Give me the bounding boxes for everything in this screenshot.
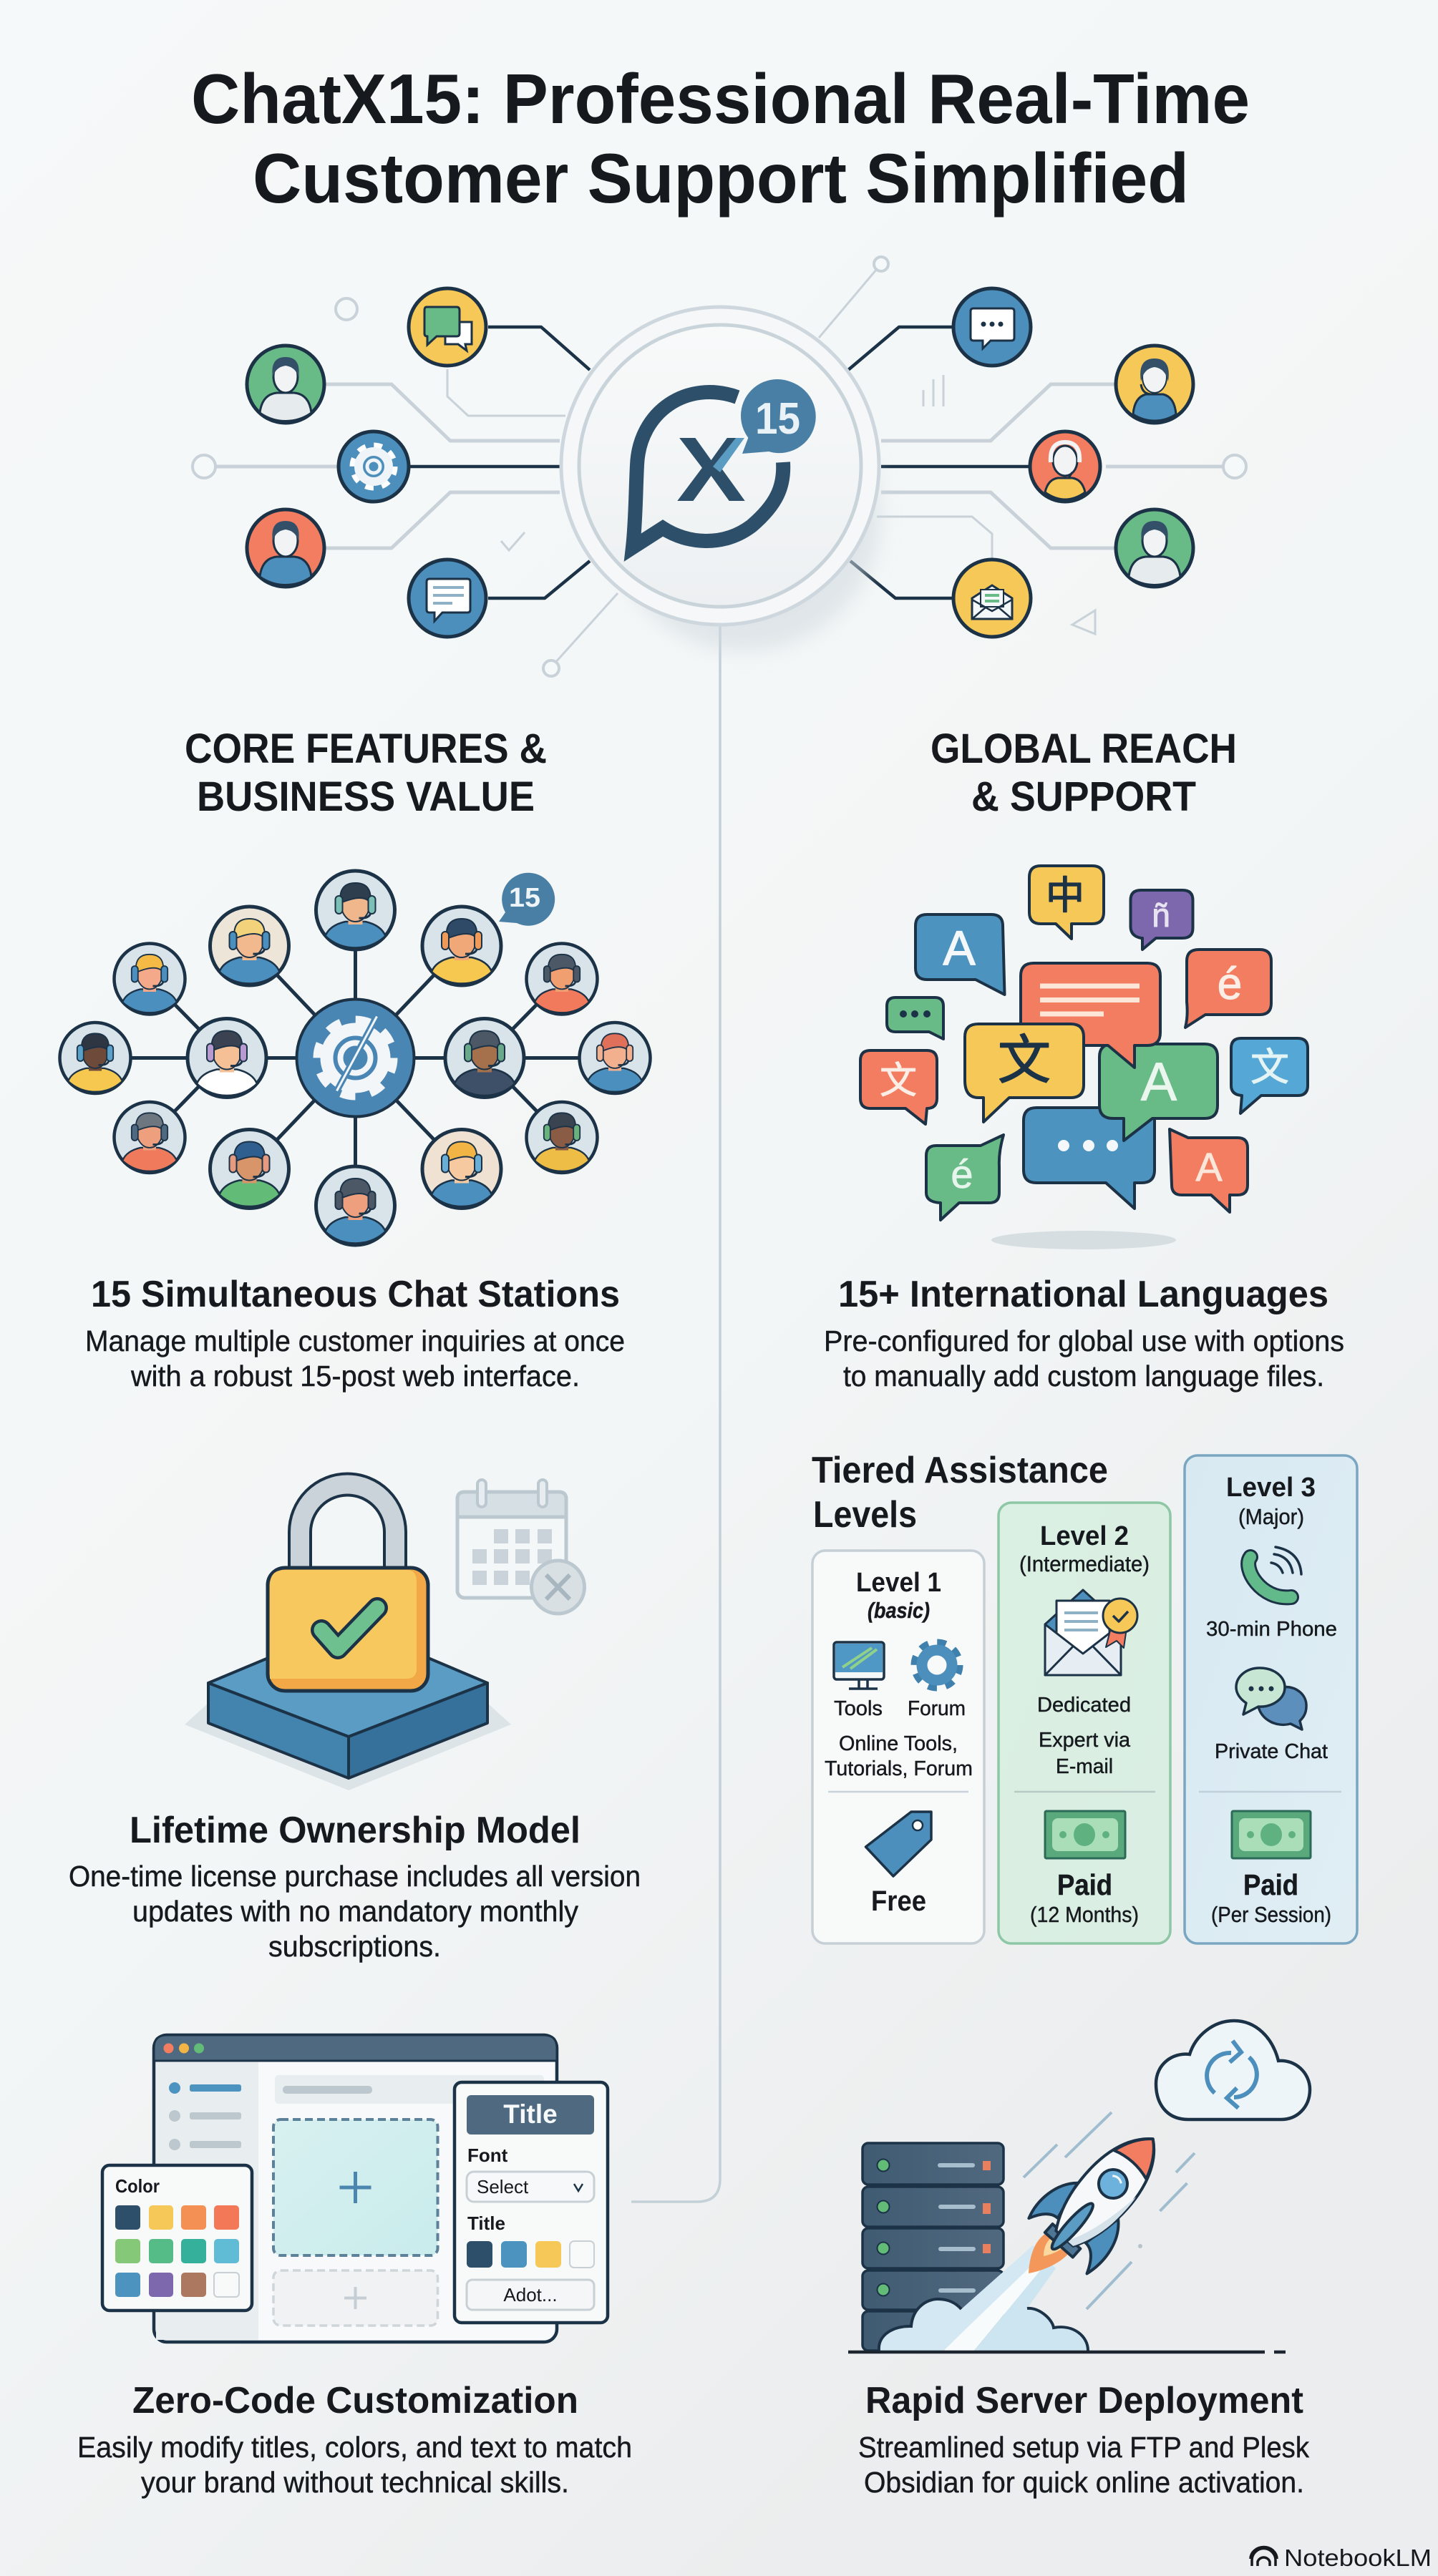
bubble: green dots small <box>887 997 943 1039</box>
calendar with x <box>457 1480 584 1614</box>
panel: level 3: Level 3 <box>1226 1473 1316 1503</box>
text: rapid server deployment <box>858 2380 1309 2499</box>
icon: monitor <box>834 1642 884 1689</box>
decorative nodes and marks <box>193 257 1246 676</box>
icon: certified email <box>1045 1590 1137 1675</box>
bubble: red A <box>1170 1129 1248 1212</box>
bubble: blue wen <box>1231 1038 1308 1113</box>
settings panel: Select <box>477 2176 529 2197</box>
spokes <box>95 910 615 1206</box>
lock body <box>268 1568 428 1691</box>
bubble: red wen <box>860 1050 937 1124</box>
watermark: NotebookLM: NotebookLM <box>1284 2545 1432 2571</box>
logo: chat bubble X15 <box>633 379 816 547</box>
node: yellow chat <box>409 288 486 366</box>
heading: tiered assistance levels: Tiered Assistance <box>812 1450 1108 1491</box>
central logo disc <box>561 307 880 651</box>
panel: level 1: Level 1 <box>856 1568 941 1598</box>
color swatch panel: Color <box>115 2175 160 2197</box>
panel: level 2: Expert via <box>1039 1729 1131 1752</box>
title: ChatX15: Professional Real-Time <box>191 59 1250 138</box>
central divider connector line <box>631 626 720 2202</box>
base shadow <box>185 1703 511 1790</box>
panel: 15 chat stations network <box>60 871 650 1245</box>
rocket <box>1022 2110 1185 2279</box>
bubble: yellow wen: 文 <box>998 1030 1051 1090</box>
settings panel: Title <box>467 2212 505 2234</box>
icon: private chat <box>1236 1668 1306 1729</box>
heading: global reach <box>931 726 1237 820</box>
panel: level 1: Tools <box>834 1697 883 1720</box>
heading: tiered assistance levels: Levels <box>813 1494 917 1536</box>
ground shadow <box>991 1231 1176 1249</box>
panel: level 3: 30-min Phone <box>1206 1618 1337 1641</box>
bubble: yellow zhong <box>1029 866 1104 939</box>
panel: language speech bubbles <box>860 866 1308 1249</box>
heading: tiered assistance levels <box>812 1450 1108 1536</box>
bubble: blue A <box>915 914 1005 995</box>
shackle <box>300 1485 395 1571</box>
panel: level 2: Level 2 <box>1040 1521 1129 1551</box>
panel: level 3: Private Chat <box>1215 1740 1328 1763</box>
node: green person right <box>1116 509 1193 587</box>
text: lifetime ownership model: Lifetime Ownership Model <box>130 1810 580 1851</box>
heading: core features <box>185 726 547 820</box>
flame <box>1029 2230 1072 2273</box>
text: 15+ international languages: Pre-configured for global use with options <box>824 1324 1344 1357</box>
panel: level 1: Online Tools, <box>839 1732 958 1755</box>
speed lines <box>1024 2112 1195 2309</box>
hero connector lines <box>216 269 1224 664</box>
cloud sync <box>1156 2021 1310 2119</box>
text: rapid server deployment: Obsidian for quick online activation. <box>864 2466 1304 2499</box>
text: zero-code customization: your brand without technical skills. <box>141 2466 569 2499</box>
panel: level 2: (12 Months) <box>1030 1902 1139 1927</box>
node: yellow person with headset <box>1116 346 1193 423</box>
bubble: purple n tilde: ñ <box>1152 897 1170 934</box>
platform <box>208 1624 487 1778</box>
bubble: green e acute <box>926 1135 1004 1220</box>
panel: level 1 <box>812 1551 984 1943</box>
text: 15+ international languages <box>824 1274 1344 1392</box>
panel: level 1: Free <box>871 1885 926 1917</box>
text: 15+ international languages: to manually add custom language files. <box>843 1360 1324 1392</box>
panel: customization UI illustration <box>102 2035 608 2342</box>
panel: level 3: (Major) <box>1238 1504 1304 1529</box>
logo: chat bubble X15: X <box>676 419 746 521</box>
panel: level 2 <box>999 1503 1170 1943</box>
icon: banknote <box>1045 1811 1125 1858</box>
panel: lifetime lock illustration <box>185 1480 584 1790</box>
text: 15 simultaneous chat stations: with a robust 15-post web interface. <box>130 1360 580 1392</box>
title: Customer Support Simplified <box>253 139 1189 218</box>
browser window <box>154 2035 557 2342</box>
bubble: blue A: A <box>943 921 976 975</box>
logo: chat bubble X15: 15 <box>755 394 800 444</box>
settings panel: Font <box>467 2145 508 2166</box>
icon: phone <box>1248 1547 1301 1597</box>
badge: 15 <box>499 873 555 926</box>
text: zero-code customization: Easily modify titles, colors, and text to match <box>77 2431 632 2464</box>
text: zero-code customization: Zero-Code Customization <box>132 2380 578 2421</box>
bubble: green e acute: é <box>951 1151 973 1196</box>
text: 15 simultaneous chat stations: Manage multiple customer inquiries at once <box>85 1324 625 1357</box>
icon: banknote <box>1232 1811 1311 1858</box>
text: lifetime ownership model <box>69 1810 641 1963</box>
bubble: yellow wen <box>965 1024 1084 1122</box>
panel: level 1: (basic) <box>868 1598 930 1623</box>
panel: level 1: Tutorials, Forum <box>825 1757 973 1780</box>
heading: core features: CORE FEATURES & <box>185 726 547 772</box>
title <box>191 59 1250 218</box>
text: lifetime ownership model: subscriptions. <box>268 1930 441 1963</box>
node: blue chat <box>953 288 1031 366</box>
node: gear <box>339 431 409 502</box>
heading: global reach: GLOBAL REACH <box>931 726 1237 772</box>
panel: level 2: (Intermediate) <box>1019 1551 1150 1576</box>
panel: level 3 <box>1185 1455 1357 1943</box>
text: zero-code customization <box>77 2380 632 2499</box>
smoke clouds and exhaust trail <box>879 2245 1088 2351</box>
panel: level 1: Forum <box>908 1697 966 1720</box>
text: rapid server deployment: Streamlined setup via FTP and Plesk <box>858 2431 1309 2464</box>
icon: forum gear <box>915 1643 959 1687</box>
bubble: purple n tilde <box>1131 890 1192 950</box>
avatars <box>60 871 650 1245</box>
bubble: yellow zhong: 中 <box>1046 874 1084 917</box>
panel: rapid deployment illustration <box>848 2021 1310 2352</box>
settings panel: Adot... <box>503 2284 558 2306</box>
node: message bubble <box>409 560 486 637</box>
text: 15 simultaneous chat stations: 15 Simultaneous Chat Stations <box>91 1274 620 1315</box>
text: lifetime ownership model: updates with no mandatory monthly <box>132 1895 578 1928</box>
bubble: red e acute <box>1185 950 1271 1028</box>
node: mail <box>953 560 1031 637</box>
settings panel <box>455 2082 608 2323</box>
settings panel: Title <box>503 2099 558 2129</box>
ground line <box>848 2351 1286 2353</box>
panel: level 3: (Per Session) <box>1211 1902 1331 1927</box>
node: red headset agent <box>1030 431 1100 502</box>
bubble: red wen: 文 <box>880 1060 917 1102</box>
icon: price tag <box>866 1812 931 1876</box>
heading: global reach: & SUPPORT <box>971 774 1196 820</box>
text: 15 simultaneous chat stations <box>85 1274 625 1392</box>
server rack <box>863 2143 1004 2351</box>
color swatch panel <box>102 2165 252 2311</box>
bubble: red lines <box>1021 963 1160 1068</box>
bubble: red A: A <box>1195 1144 1223 1189</box>
panel: level 2: Dedicated <box>1037 1694 1131 1717</box>
panel: level 2: E-mail <box>1056 1755 1113 1778</box>
bubble: green A <box>1099 1044 1218 1141</box>
badge: 15: 15 <box>509 883 540 913</box>
hero: chat network illustration <box>193 257 1246 676</box>
text: rapid server deployment: Rapid Server Deployment <box>865 2380 1303 2421</box>
bubble: blue dots <box>1024 1108 1155 1209</box>
node: green person <box>247 346 324 423</box>
bubble: blue wen: 文 <box>1250 1046 1289 1089</box>
bubble: red e acute: é <box>1218 960 1242 1009</box>
text: 15+ international languages: 15+ International Languages <box>838 1274 1328 1315</box>
node: red person <box>247 509 324 587</box>
text: lifetime ownership model: One-time license purchase includes all version <box>69 1860 641 1893</box>
panel: level 2: Paid <box>1057 1868 1112 1901</box>
bubble: green A: A <box>1141 1052 1177 1113</box>
heading: core features: BUSINESS VALUE <box>197 774 535 820</box>
hub gear <box>296 999 414 1116</box>
panel: level 3: Paid <box>1243 1868 1298 1901</box>
